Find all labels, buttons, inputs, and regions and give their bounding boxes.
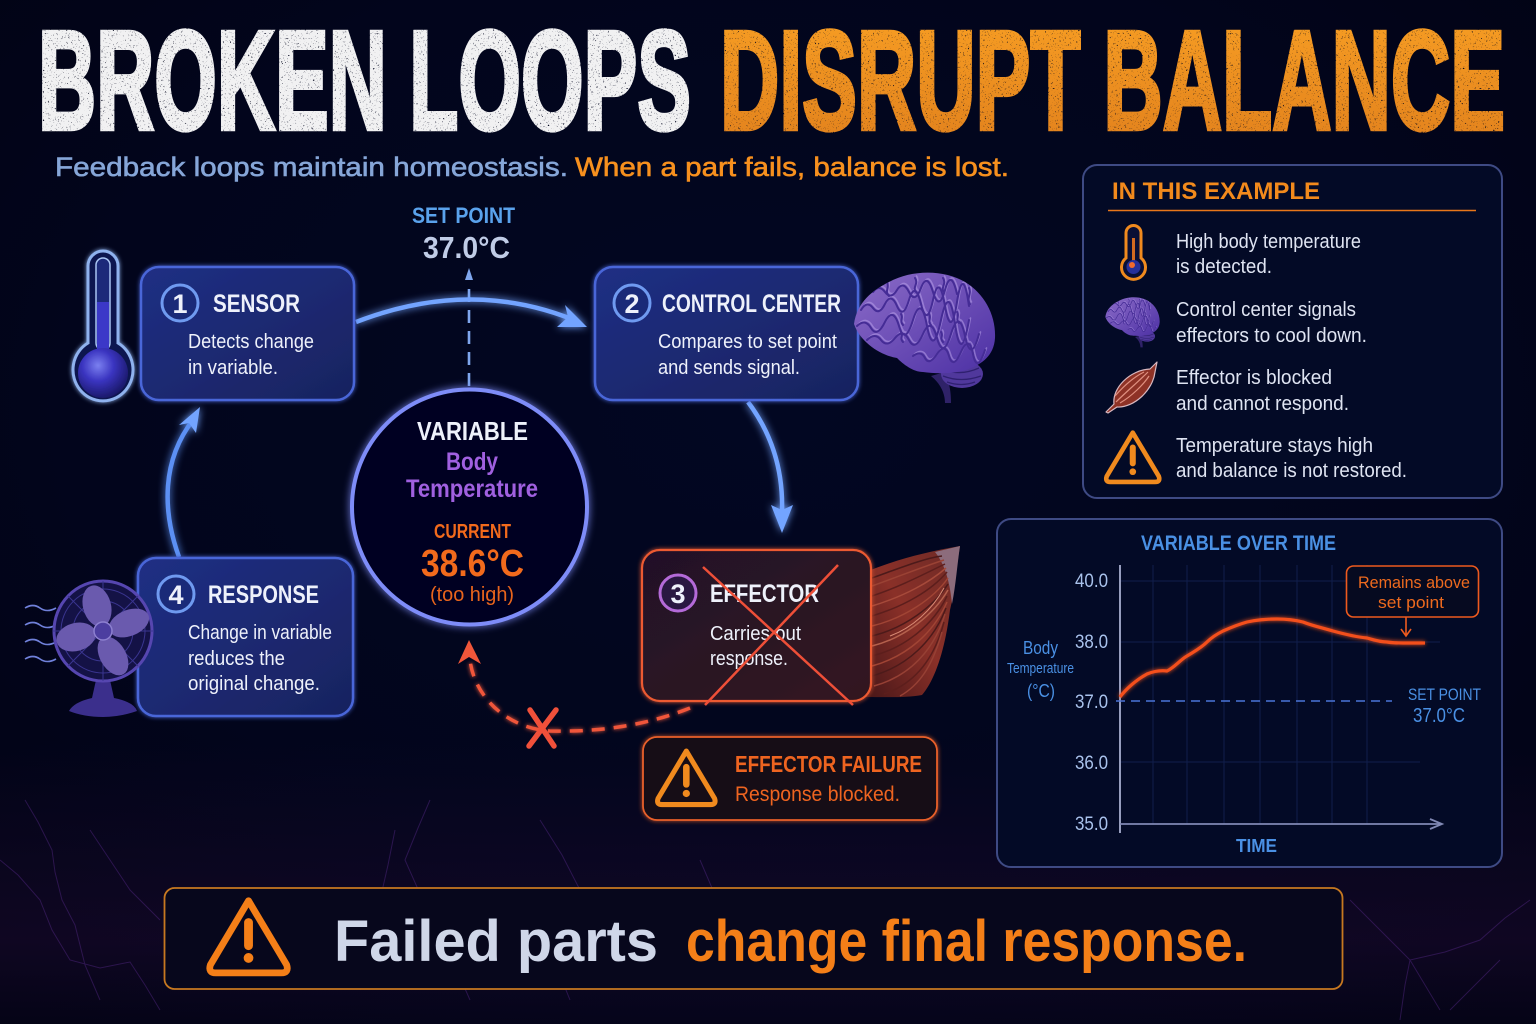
text: failure message xyxy=(735,751,922,806)
text: failure message: Response blocked. xyxy=(735,783,900,806)
chart title: VARIABLE OVER TIME xyxy=(1141,532,1336,555)
subtitle: When a part fails, balance is lost. xyxy=(575,152,1009,182)
icon: banner warning xyxy=(210,901,287,973)
variable circle: 38.6°C xyxy=(421,543,524,585)
title: BROKEN LOOPS xyxy=(38,1,691,159)
callout: remains above set point xyxy=(1346,566,1478,636)
connector: effector to failure xyxy=(766,702,768,737)
heading: effector: EFFECTOR xyxy=(710,580,819,608)
set point label xyxy=(412,203,515,265)
text: item 2: effectors to cool down. xyxy=(1176,325,1367,347)
badge: 2: 2 xyxy=(624,289,640,319)
text: control center description: Compares to set point xyxy=(658,331,837,353)
variable circle: Temperature xyxy=(406,475,538,503)
heading: sensor: SENSOR xyxy=(213,290,300,318)
banner text: change final response. xyxy=(686,909,1247,974)
arrow: response to sensor xyxy=(168,407,200,557)
icon: brain xyxy=(854,273,995,403)
temperature curve xyxy=(1120,619,1425,697)
set point label: 37.0°C xyxy=(423,230,510,265)
icon: small thermometer xyxy=(1122,226,1146,279)
panel: control center xyxy=(595,267,858,400)
text: sensor description: in variable. xyxy=(188,357,278,379)
arrow: control center to effector xyxy=(748,402,793,533)
set point chart label: SET POINT xyxy=(1408,685,1481,704)
variable circle: Body xyxy=(446,448,498,476)
badge: 3: 3 xyxy=(670,579,686,609)
panel: sensor xyxy=(141,267,354,400)
text: control center description: and sends signal. xyxy=(658,357,800,379)
icon: thermometer xyxy=(73,251,133,401)
y axis labels xyxy=(1075,571,1108,835)
set point line xyxy=(1116,700,1392,702)
text: item 3 xyxy=(1176,367,1349,415)
badge: 3 xyxy=(660,575,696,611)
variable circle: CURRENT xyxy=(434,521,511,543)
panel: in this example xyxy=(1083,165,1502,498)
text: item 3: and cannot respond. xyxy=(1176,393,1349,415)
variable circle: VARIABLE xyxy=(417,416,528,446)
cross-out mark xyxy=(703,565,853,705)
text: sensor description: Detects change xyxy=(188,331,314,353)
text: item 4: Temperature stays high xyxy=(1176,435,1373,457)
variable circle: (too high) xyxy=(430,584,514,606)
text: control center description xyxy=(658,331,837,379)
icon: small brain xyxy=(1105,297,1160,347)
callout: remains above set point: Remains above xyxy=(1358,573,1470,592)
text: item 3: Effector is blocked xyxy=(1176,367,1332,389)
text: effector description: response. xyxy=(710,648,788,670)
subtitle xyxy=(55,152,1009,182)
arrow: set point dashed line xyxy=(465,268,473,386)
badge: 2 xyxy=(614,285,650,321)
text: item 1: is detected. xyxy=(1176,256,1272,278)
badge: 4 xyxy=(158,576,194,612)
icon: warning triangle xyxy=(658,751,715,805)
y axis title: Body xyxy=(1023,638,1058,658)
axes xyxy=(1120,565,1442,833)
banner text: Failed parts xyxy=(334,909,658,974)
badge: 1 xyxy=(162,285,198,321)
text: sensor description xyxy=(188,331,314,379)
panel: effector xyxy=(642,550,871,705)
set point chart label xyxy=(1408,685,1481,727)
icon: muscle xyxy=(864,546,960,697)
badge: 4: 4 xyxy=(168,580,184,610)
text: response description: original change. xyxy=(188,673,320,695)
x axis title: TIME xyxy=(1236,836,1277,856)
text: item 4: and balance is not restored. xyxy=(1176,460,1407,482)
y axis title: (°C) xyxy=(1027,681,1055,701)
panel: response xyxy=(138,558,353,716)
y axis title xyxy=(1007,638,1074,701)
y axis labels: 36.0 xyxy=(1075,753,1108,774)
y axis labels: 40.0 xyxy=(1075,571,1108,592)
banner: failed parts xyxy=(164,888,1342,989)
variable circle xyxy=(352,390,587,624)
text: effector description: Carries out xyxy=(710,623,801,645)
icon: fan xyxy=(25,581,153,717)
y axis title: Temperature xyxy=(1007,660,1074,677)
heading: control center: CONTROL CENTER xyxy=(662,290,841,318)
text: failure message: EFFECTOR FAILURE xyxy=(735,751,922,777)
callout: remains above set point: set point xyxy=(1378,593,1444,612)
icon: red X xyxy=(529,710,556,746)
banner text xyxy=(334,909,1247,974)
y axis labels: 37.0 xyxy=(1075,692,1108,713)
badge: 1: 1 xyxy=(172,289,188,319)
arrow: sensor to control center xyxy=(356,299,587,327)
heading: in this example: IN THIS EXAMPLE xyxy=(1112,178,1320,205)
subtitle: Feedback loops maintain homeostasis. xyxy=(55,152,568,182)
y axis labels: 35.0 xyxy=(1075,814,1108,835)
text: response description: Change in variable xyxy=(188,622,332,644)
arrow: blocked response path xyxy=(458,640,690,746)
text: item 2 xyxy=(1176,299,1367,347)
text: item 4 xyxy=(1176,435,1407,482)
text: response description: reduces the xyxy=(188,648,285,670)
text: item 1 xyxy=(1176,231,1361,278)
panel: variable over time chart xyxy=(997,519,1502,867)
icon: small warning xyxy=(1106,433,1159,482)
icon: small muscle xyxy=(1106,362,1157,413)
text: item 2: Control center signals xyxy=(1176,299,1356,321)
text: effector description xyxy=(710,623,801,670)
set point chart label: 37.0°C xyxy=(1413,705,1465,727)
heading: response: RESPONSE xyxy=(208,581,319,609)
text: response description xyxy=(188,622,332,695)
text: item 1: High body temperature xyxy=(1176,231,1361,253)
set point label: SET POINT xyxy=(412,203,515,228)
y axis labels: 38.0 xyxy=(1075,632,1108,653)
callout: effector failure xyxy=(643,737,937,820)
